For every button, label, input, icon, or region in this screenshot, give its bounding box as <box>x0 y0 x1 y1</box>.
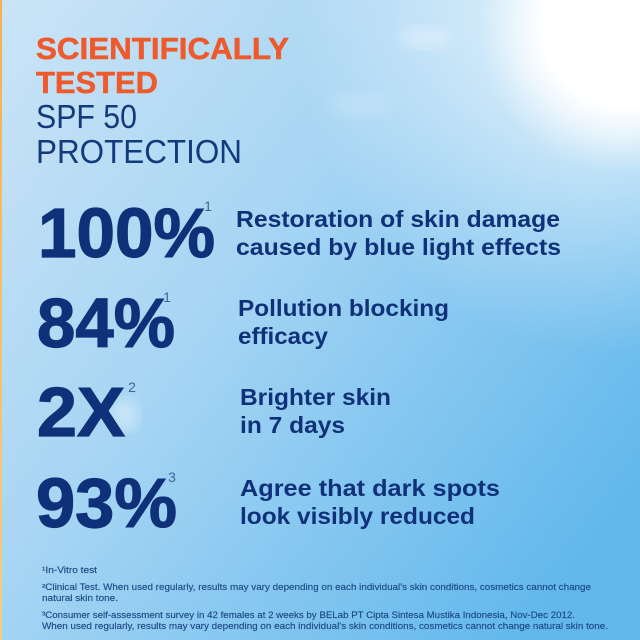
stat: 2X brighter: 2 <box>128 379 136 395</box>
stat: 93% dark spots: 3 <box>168 469 176 485</box>
footnotes: ²Clinical Test. When used regularly, results may vary depending on each individual's skin conditions, cosmetics cannot change <box>42 582 591 592</box>
stat: 93% dark spots: look visibly reduced <box>240 503 475 529</box>
footnotes: When used regularly, results may vary depending on each individual's skin conditions, cosmetics cannot change natural skin tone. <box>42 621 608 631</box>
orange edge strip <box>0 0 2 640</box>
footnotes: ¹In-Vitro test <box>42 565 98 575</box>
stat: 100% restoration <box>38 194 561 272</box>
stat: 84% pollution: 84% <box>37 284 175 362</box>
stat: 84% pollution <box>37 284 449 362</box>
stat: 84% pollution: efficacy <box>238 323 328 349</box>
footnotes: ³Consumer self-assessment survey in 42 females at 2 weeks by BELab PT Cipta Sintesa Mustika Indonesia, Nov-Dec 2012. <box>42 610 575 620</box>
stat: 2X brighter <box>37 373 391 451</box>
stat: 93% dark spots: Agree that dark spots <box>240 475 500 501</box>
stat: 2X brighter: Brighter skin <box>240 384 391 410</box>
stat: 100% restoration: caused by blue light effects <box>236 234 561 260</box>
title: SPF 50 <box>36 98 137 135</box>
stat: 93% dark spots <box>36 464 500 542</box>
stat: 2X brighter: in 7 days <box>240 412 345 438</box>
stat: 100% restoration: Restoration of skin damage <box>236 206 560 232</box>
stat: 84% pollution: Pollution blocking <box>238 295 449 321</box>
stat: 100% restoration: 100% <box>38 194 215 272</box>
stat: 93% dark spots: 93% <box>36 464 177 542</box>
title: SCIENTIFICALLY <box>36 31 289 66</box>
title: PROTECTION <box>36 133 242 170</box>
footnotes <box>42 565 608 631</box>
title <box>36 31 289 170</box>
footnotes: natural skin tone. <box>42 593 118 603</box>
title: TESTED <box>36 65 158 100</box>
stat: 84% pollution: 1 <box>163 289 171 305</box>
stat: 100% restoration: 1 <box>204 198 212 214</box>
stat: 2X brighter: 2X <box>37 373 125 451</box>
